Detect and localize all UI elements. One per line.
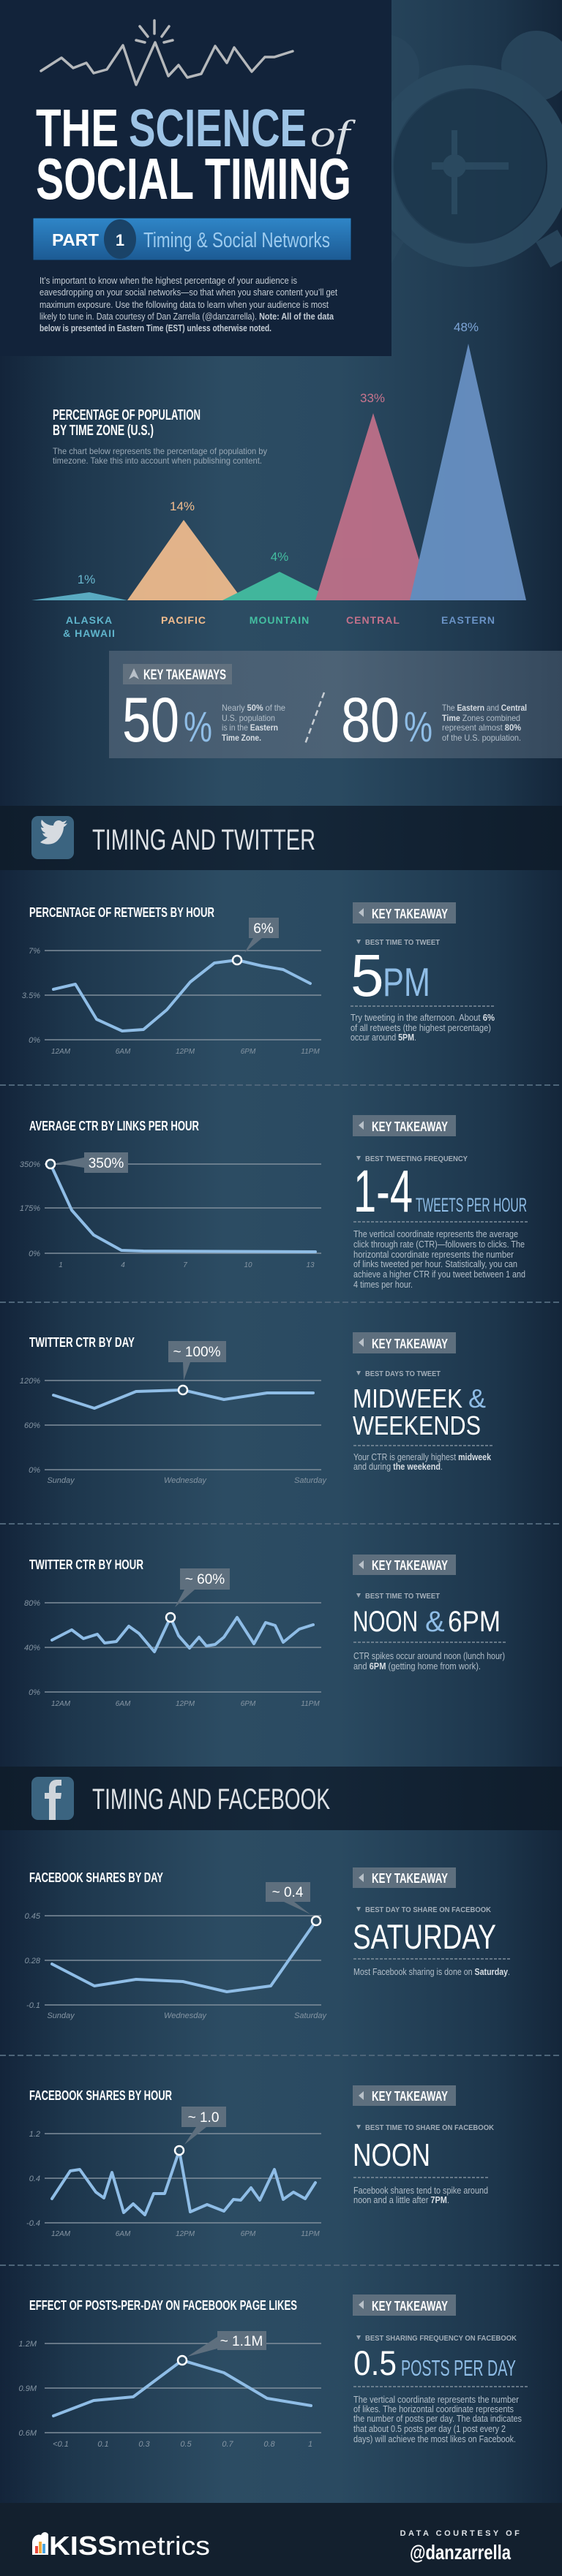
stat 50%: %: [184, 703, 212, 751]
takeaway: saturday: BEST DAY TO SHARE ON FACEBOOK: [365, 1906, 492, 1914]
value labels: 4%: [271, 550, 288, 564]
value labels: 33%: [360, 391, 385, 405]
value labels: [78, 320, 479, 586]
takeaway: saturday: Most Facebook sharing is done on Saturday.: [353, 1967, 510, 1977]
chart: percentage of retweets by hour: [22, 905, 321, 1056]
zone labels: [63, 614, 495, 639]
title: SCIENCE: [129, 99, 307, 158]
takeaway: 0.5 posts per day: The vertical coordinate represents the number: [353, 2395, 519, 2405]
footer: data courtesy: @danzarrella: [410, 2541, 511, 2564]
panel: population by time zone: [31, 320, 526, 639]
chart: twitter ctr by hour: [24, 1557, 321, 1708]
title: SOCIAL TIMING: [36, 146, 351, 211]
takeaway: 1-4 tweets: achieve a higher CTR if you tweet between 1 and: [353, 1269, 525, 1280]
chart: twitter ctr by day: 0%: [29, 1466, 40, 1475]
zone labels: EASTERN: [441, 614, 495, 626]
stat 50%: Time Zone.: [222, 733, 261, 743]
chart: facebook shares by day: -0.1: [26, 2001, 40, 2010]
takeaway: saturday: SATURDAY: [353, 1917, 496, 1956]
footer: data courtesy: [400, 2529, 522, 2564]
footer: data courtesy: DATA COURTESY OF: [400, 2529, 522, 2538]
chart: percentage of retweets by hour: 12AM: [51, 1048, 71, 1056]
chart: average ctr by links per hour: 1: [59, 1261, 63, 1269]
callout: [181, 2107, 226, 2145]
zone labels: MOUNTAIN: [250, 614, 310, 626]
description: [53, 446, 267, 466]
top dark panel: [0, 0, 391, 356]
callout: ~ 1.1M: [220, 2334, 263, 2349]
chart: facebook shares by hour: [26, 2088, 321, 2238]
description: The chart below represents the percentage of population by: [53, 446, 267, 456]
part banner: Timing & Social Networks: [143, 229, 330, 252]
chart: facebook shares by day: Wednesday: [164, 2012, 207, 2020]
chart: twitter ctr by day: 120%: [20, 1377, 40, 1386]
callout: [244, 918, 279, 953]
chart: facebook shares by hour: 12AM: [51, 2230, 71, 2238]
chart: percentage of retweets by hour: 12PM: [176, 1048, 195, 1056]
heading: [53, 407, 201, 439]
takeaway: saturday: [353, 1867, 511, 1977]
zone labels: & HAWAII: [63, 627, 116, 639]
takeaway: 1-4 tweets: KEY TAKEAWAY: [372, 1119, 448, 1134]
takeaway: 0.5 posts per day: 0.5: [353, 2343, 397, 2382]
chart: effect of posts-per-day on page likes: 0.9M: [19, 2384, 37, 2393]
takeaway: noon & 6pm: 6PM: [448, 1606, 501, 1638]
chart: average ctr by links per hour: 7: [183, 1261, 187, 1269]
takeaway: noon & 6pm: &: [425, 1606, 445, 1638]
chart: percentage of retweets by hour: 3.5%: [22, 992, 40, 1000]
takeaway: 0.5 posts per day: KEY TAKEAWAY: [372, 2299, 448, 2314]
takeaway: 0.5 posts per day: of likes. The horizontal coordinate represents: [353, 2404, 514, 2414]
chart: effect of posts-per-day on page likes: 0.3: [138, 2440, 151, 2449]
takeaway: noon: KEY TAKEAWAY: [372, 2089, 448, 2104]
intro text: maximum exposure. Use the following data to learn when your audience is most: [40, 300, 329, 310]
zone labels: ALASKA: [66, 614, 113, 626]
chart: twitter ctr by hour: TWITTER CTR BY HOUR: [29, 1557, 143, 1572]
chart: twitter ctr by hour: 6PM: [241, 1700, 256, 1708]
header: timing and twitter: TIMING AND TWITTER: [92, 824, 315, 856]
chart: triangles: [31, 344, 526, 600]
chart: facebook shares by hour: 6AM: [116, 2230, 131, 2238]
chart: average ctr by links per hour: 350%: [20, 1160, 40, 1169]
intro text: likely to tune in. Data courtesy of Dan Zarrella (@danzarrella). Note: All of the data: [40, 311, 334, 322]
chart: effect of posts-per-day on page likes: <0.1: [53, 2440, 69, 2449]
chart: twitter ctr by hour: 0%: [29, 1688, 40, 1697]
stat 50%: Nearly 50% of the: [222, 703, 285, 713]
takeaway: 5pm: PM: [383, 959, 430, 1005]
intro text: It’s important to know when the highest percentage of your audience is: [40, 276, 297, 286]
key takeaways tag: [123, 664, 232, 684]
chart: effect of posts-per-day on page likes: 0.6M: [19, 2429, 37, 2438]
takeaway: noon: noon and a little after 7PM.: [353, 2195, 449, 2205]
chart: effect of posts-per-day on page likes: EFFECT OF POSTS-PER-DAY ON FACEBOOK PAGE LIKES: [29, 2298, 297, 2313]
chart: effect of posts-per-day on page likes: 1: [308, 2440, 312, 2449]
takeaway: 0.5 posts per day: the number of posts per day. The data indicates: [353, 2414, 522, 2424]
part banner: 1: [116, 231, 124, 249]
stat 50%: is in the Eastern: [222, 722, 278, 733]
takeaway: saturday: KEY TAKEAWAY: [372, 1871, 448, 1886]
chart: effect of posts-per-day on page likes: 0.7: [222, 2440, 234, 2449]
takeaway: 1-4 tweets: click through rate (CTR)—followers to clicks. The: [353, 1239, 525, 1250]
takeaway: 5pm: KEY TAKEAWAY: [372, 907, 448, 921]
takeaway: 1-4 tweets: [353, 1115, 528, 1290]
stat 50%: 50: [122, 685, 179, 755]
takeaway: 5pm: [351, 902, 495, 1043]
chart: average ctr by links per hour: 4: [121, 1261, 125, 1269]
stat 80%: [341, 685, 527, 755]
chart: average ctr by links per hour: AVERAGE CTR BY LINKS PER HOUR: [29, 1119, 199, 1133]
header: timing and facebook: TIMING AND FACEBOOK: [92, 1783, 330, 1816]
takeaway: midweek & weekends: and during the weekend.: [353, 1462, 443, 1472]
chart: effect of posts-per-day on page likes: 0.1: [97, 2440, 109, 2449]
takeaway: noon & 6pm: CTR spikes occur around noon (lunch hour): [353, 1651, 505, 1661]
description: timezone. Take this into account when publishing content.: [53, 456, 262, 466]
intro text: below is presented in Eastern Time (EST) unless otherwise noted.: [40, 323, 271, 333]
part banner: [33, 218, 351, 260]
chart: facebook shares by hour: 12PM: [176, 2230, 195, 2238]
chart: facebook shares by day: Saturday: [294, 2012, 328, 2020]
chart: effect of posts-per-day on page likes: 0.5: [180, 2440, 192, 2449]
title: THE: [36, 99, 119, 158]
chart: facebook shares by day: 0.45: [25, 1912, 41, 1921]
stat 80%: The Eastern and Central: [442, 703, 527, 713]
title: [36, 99, 356, 211]
stat 80%: represent almost 80%: [442, 722, 521, 733]
takeaway: 1-4 tweets: horizontal coordinate represents the number: [353, 1250, 514, 1260]
heading: BY TIME ZONE (U.S.): [53, 423, 154, 439]
takeaway: 0.5 posts per day: days) will achieve the most likes on Facebook.: [353, 2434, 516, 2444]
value labels: 48%: [454, 320, 479, 334]
chart: average ctr by links per hour: 175%: [20, 1204, 40, 1213]
footer: kissmetrics logo: metrics: [117, 2531, 210, 2561]
chart: percentage of retweets by hour: 6PM: [241, 1048, 256, 1056]
takeaway: 5pm: BEST TIME TO TWEET: [365, 939, 440, 947]
takeaway: 0.5 posts per day: BEST SHARING FREQUENCY ON FACEBOOK: [365, 2335, 517, 2343]
intro text: [40, 276, 337, 333]
heading: PERCENTAGE OF POPULATION: [53, 407, 201, 423]
takeaway: midweek & weekends: &: [468, 1383, 486, 1413]
takeaway: noon: [353, 2085, 495, 2205]
chart: percentage of retweets by hour: 11PM: [301, 1048, 320, 1056]
chart: twitter ctr by hour: 6AM: [116, 1700, 131, 1708]
part banner: PART: [52, 230, 99, 249]
takeaway: 5pm: of all retweets (the highest percentage): [351, 1023, 491, 1033]
panel: key takeaways: [109, 651, 562, 758]
takeaway: noon & 6pm: [353, 1555, 506, 1672]
chart: facebook shares by day: 0.28: [25, 1957, 41, 1965]
chart: twitter ctr by hour: 40%: [24, 1644, 40, 1653]
takeaway: 5pm: Try tweeting in the afternoon. About 6%: [351, 1013, 495, 1023]
zone labels: PACIFIC: [161, 614, 206, 626]
chart: effect of posts-per-day on page likes: [19, 2298, 321, 2449]
chart: effect of posts-per-day on page likes: 0.8: [263, 2440, 276, 2449]
chart: twitter ctr by day: [20, 1335, 328, 1485]
chart: facebook shares by hour: 1.2: [29, 2130, 40, 2139]
chart: average ctr by links per hour: 0%: [29, 1250, 40, 1258]
takeaway: 0.5 posts per day: that about 0.5 posts per day (1 post every 2: [353, 2424, 506, 2434]
callout: 350%: [89, 1156, 124, 1171]
chart: twitter ctr by day: 60%: [24, 1421, 40, 1430]
icon: twitter bird: [31, 816, 74, 859]
callout: ~ 60%: [185, 1572, 225, 1587]
chart: facebook shares by day: [25, 1870, 328, 2020]
chart: percentage of retweets by hour: 0%: [29, 1036, 40, 1045]
chart: facebook shares by hour: 6PM: [241, 2230, 256, 2238]
icon: facebook f: [31, 1777, 74, 1820]
chart: facebook shares by hour: FACEBOOK SHARES BY HOUR: [29, 2088, 172, 2103]
takeaway: 1-4 tweets: BEST TWEETING FREQUENCY: [365, 1155, 468, 1163]
footer: kissmetrics logo: [32, 2531, 210, 2561]
chart: facebook shares by day: Sunday: [47, 2012, 75, 2020]
takeaway: noon & 6pm: KEY TAKEAWAY: [372, 1558, 448, 1573]
chart: effect of posts-per-day on page likes: 1.2M: [19, 2340, 37, 2349]
takeaway: midweek & weekends: WEEKENDS: [353, 1410, 481, 1440]
chart: twitter ctr by hour: 12AM: [51, 1700, 71, 1708]
header: timing and twitter: [0, 806, 562, 870]
takeaway: 1-4 tweets: The vertical coordinate represents the average: [353, 1229, 518, 1239]
takeaway: noon: Facebook shares tend to spike around: [353, 2186, 488, 2196]
chart: facebook shares by hour: 0.4: [29, 2175, 40, 2183]
chart: twitter ctr by day: TWITTER CTR BY DAY: [29, 1335, 135, 1350]
chart: average ctr by links per hour: 10: [244, 1261, 252, 1269]
chart: twitter ctr by day: Sunday: [47, 1476, 75, 1485]
chart: twitter ctr by hour: 11PM: [301, 1700, 320, 1708]
callout: 6%: [253, 921, 274, 937]
callout: [266, 1882, 310, 1914]
footer: kissmetrics logo: KISS: [49, 2531, 117, 2561]
takeaway: noon & 6pm: NOON: [353, 1606, 418, 1638]
takeaway: 1-4 tweets: 1-4: [353, 1158, 413, 1225]
chart: facebook shares by hour: -0.4: [26, 2219, 40, 2228]
takeaway: midweek & weekends: BEST DAYS TO TWEET: [365, 1370, 441, 1378]
chart: twitter ctr by day: Wednesday: [164, 1476, 207, 1485]
callout: [168, 1341, 226, 1380]
icon: signal wave: [41, 20, 293, 85]
footer background: [0, 2503, 562, 2576]
chart: twitter ctr by day: Saturday: [294, 1476, 328, 1485]
takeaway: noon & 6pm: BEST TIME TO TWEET: [365, 1593, 440, 1601]
chart: percentage of retweets by hour: 7%: [29, 947, 40, 956]
takeaway: 5pm: 5: [351, 943, 384, 1009]
takeaway: noon: NOON: [353, 2137, 430, 2173]
icon: alarm clock background: [349, 31, 562, 268]
callout: ~ 100%: [173, 1345, 221, 1360]
chart: twitter ctr by hour: 80%: [24, 1599, 40, 1608]
chart: average ctr by links per hour: [20, 1119, 321, 1269]
chart: facebook shares by day: FACEBOOK SHARES BY DAY: [29, 1870, 163, 1885]
zone labels: CENTRAL: [346, 614, 400, 626]
takeaway: 0.5 posts per day: [353, 2294, 528, 2444]
value labels: 14%: [170, 499, 195, 513]
takeaway: 1-4 tweets: of links tweeted per hour. Statistically, you can: [353, 1259, 517, 1269]
takeaway: noon & 6pm: and 6PM (getting home from work).: [353, 1661, 481, 1672]
chart: average ctr by links per hour: 13: [306, 1261, 315, 1269]
intro text: eavesdropping on your social networks—so that when you share content you’ll get: [40, 287, 337, 298]
title: of: [310, 113, 356, 155]
chart: facebook shares by hour: 11PM: [301, 2230, 320, 2238]
stat 80%: of the U.S. population.: [442, 733, 521, 743]
takeaway: 1-4 tweets: 4 times per hour.: [353, 1280, 413, 1290]
chart: percentage of retweets by hour: PERCENTAGE OF RETWEETS BY HOUR: [29, 905, 214, 920]
stat 80%: Time Zones combined: [442, 713, 520, 723]
callout: [175, 1568, 230, 1607]
callout: [187, 2331, 266, 2357]
chart: twitter ctr by hour: 12PM: [176, 1700, 195, 1708]
key takeaways tag: KEY TAKEAWAYS: [143, 668, 226, 683]
value labels: 1%: [78, 573, 95, 586]
takeaway: 5pm: occur around 5PM.: [351, 1032, 416, 1043]
takeaway: midweek & weekends: [353, 1332, 493, 1472]
stat 80%: 80: [341, 685, 400, 755]
header: timing and facebook: [0, 1767, 562, 1830]
takeaway: noon: BEST TIME TO SHARE ON FACEBOOK: [365, 2124, 495, 2132]
takeaway: midweek & weekends: MIDWEEK: [353, 1383, 462, 1413]
stat 80%: %: [404, 703, 432, 751]
callout: ~ 1.0: [188, 2110, 219, 2126]
takeaway: midweek & weekends: KEY TAKEAWAY: [372, 1337, 448, 1351]
stat 50%: [122, 685, 285, 755]
chart: percentage of retweets by hour: 6AM: [116, 1048, 131, 1056]
stat 50%: U.S. population: [222, 713, 275, 723]
callout: ~ 0.4: [272, 1885, 304, 1900]
takeaway: midweek & weekends: Your CTR is generally highest midweek: [353, 1452, 491, 1462]
callout: [56, 1152, 128, 1173]
